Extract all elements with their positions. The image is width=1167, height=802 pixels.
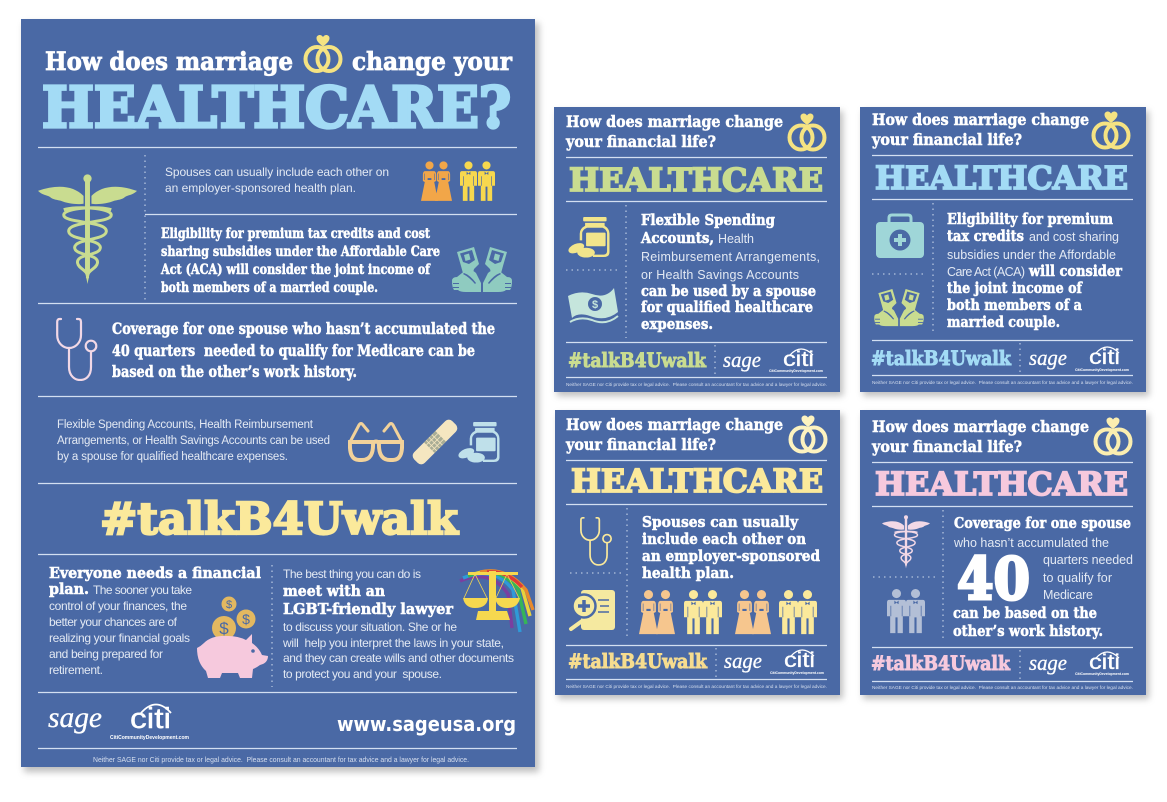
card text: Coverage for one spouse [954, 514, 1131, 532]
text: financial plan: realizing your financial goals [49, 631, 190, 645]
poster shadow [24, 23, 539, 772]
disclaimer: Neither SAGE nor Citi provide tax or legal advice. Please consult an accountant for tax advice and a lawyer for legal advice. [93, 755, 469, 764]
card title: your financial life? [871, 130, 1022, 149]
logo: citi [110, 703, 190, 741]
card text: Spouses can usually [642, 513, 799, 531]
card text [642, 513, 820, 582]
card title [565, 415, 783, 454]
icon: stethoscope [581, 518, 611, 565]
logos [1029, 345, 1129, 372]
text: financial plan: retirement. [49, 663, 103, 677]
text: financial plan: Everyone needs a financial [49, 565, 261, 582]
text: lawyer advice: will help you interpret the laws in your state, [282, 636, 504, 650]
hashtag: #talkB4Uwalk [100, 494, 460, 545]
card text: Health [718, 232, 754, 246]
card text: for qualified healthcare [641, 299, 813, 316]
icon: caduceus [38, 174, 137, 284]
text: financial plan: The sooner you take [93, 583, 192, 597]
icon: caduceus [882, 515, 930, 568]
card text: both members of a [947, 297, 1083, 314]
card text: can be used by a spouse [641, 283, 816, 300]
card text: Flexible Spending [641, 212, 775, 229]
card text: other’s work history. [953, 622, 1103, 640]
text: flexible spending [57, 419, 330, 463]
text: financial plan: and being prepared for [49, 647, 163, 661]
card title: How does marriage change [872, 110, 1089, 129]
title line one [45, 47, 513, 76]
text: eligibility: Eligibility for premium tax credits and cost [161, 226, 431, 242]
icon: grooms [887, 589, 925, 633]
text: eligibility [160, 226, 440, 296]
icon: rings [790, 415, 826, 452]
card text: Care Act (ACA) [947, 265, 1025, 279]
card text: Accounts, [640, 230, 714, 247]
hashtag: #talkB4Uwalk [871, 651, 1011, 675]
logos: CitiCommunityDevelopment.com [1075, 672, 1129, 676]
logos [724, 648, 824, 675]
icon: pill bottle [457, 422, 500, 463]
text: financial plan: better your chances are of [49, 615, 178, 629]
text: spouses [165, 165, 389, 195]
heading: HEALTHCARE [875, 465, 1128, 503]
icon: wedding rings [306, 35, 340, 71]
icon: bottle [567, 217, 610, 258]
card title: your financial life? [565, 132, 716, 151]
text: spouses: Spouses can usually include each other on [165, 165, 389, 179]
card text: will consider [1028, 263, 1122, 280]
logos: CitiCommunityDevelopment.com [770, 671, 824, 675]
icon: money hands [452, 247, 512, 292]
text: coverage [112, 319, 495, 381]
panel: poster [21, 19, 535, 767]
logo: sage: sage [48, 701, 102, 734]
card title [871, 110, 1089, 149]
heading: HEALTHCARE [569, 161, 823, 199]
icon: bandage [411, 418, 459, 466]
text: coverage: 40 quarters needed to qualify for Medicare can be [112, 341, 475, 360]
card text [947, 211, 1122, 331]
text: lawyer advice: The best thing you can do is [283, 567, 421, 581]
card text: and cost sharing [1029, 230, 1119, 244]
card text: health plan. [642, 564, 734, 582]
card title [871, 417, 1089, 456]
heading: HEALTHCARE [875, 159, 1128, 197]
card text: can be based on the [953, 604, 1097, 622]
website: www.sageusa.org [337, 712, 516, 736]
card text: the joint income of [947, 280, 1084, 297]
text: eligibility: Act (ACA) will consider the joint income of [160, 262, 431, 278]
text: lawyer advice: meet with an [283, 582, 385, 600]
panel: medicare card [860, 410, 1146, 695]
icon: stethoscope [57, 319, 96, 380]
icon: couples [421, 161, 495, 201]
card title: How does marriage change [566, 112, 783, 131]
card text: tax credits [947, 228, 1024, 245]
icon: rainbow scales of justice [460, 571, 533, 632]
text: eligibility: both members of a married couple. [161, 280, 378, 296]
icon: couples row [639, 590, 817, 634]
logos: citi [1089, 346, 1120, 369]
logos: citi [1089, 651, 1120, 674]
logos: sage [724, 648, 762, 673]
logos: sage [1029, 650, 1067, 675]
icon: rings [790, 113, 824, 150]
text: flexible spending: Arrangements, or Health Savings Accounts can be used [57, 435, 330, 447]
panel: premium tax credits card [860, 107, 1146, 392]
icon: cash [568, 288, 618, 322]
card text: expenses. [641, 316, 713, 333]
title line one: How does marriage [45, 47, 293, 76]
text: lawyer advice [282, 567, 514, 681]
text: flexible spending: by a spouse for qualified healthcare expenses. [57, 451, 288, 463]
logo: citi: citi [130, 703, 171, 735]
card text [953, 514, 1133, 640]
text: financial plan [49, 565, 261, 677]
card text: Medicare [1043, 588, 1093, 602]
hashtag: #talkB4Uwalk [568, 649, 708, 673]
logos: sage [723, 347, 761, 372]
card title: How does marriage change [566, 415, 783, 434]
logos: citi [783, 348, 814, 371]
icon: rings [1096, 417, 1130, 454]
icon: medical kit [876, 215, 924, 258]
panel shadows [557, 111, 1149, 699]
icon: piggy bank with coins: $ [219, 619, 229, 638]
card text: an employer-sponsored [642, 547, 820, 565]
icon: rings [1094, 111, 1128, 148]
card text: include each other on [642, 530, 806, 548]
disclaimer: Neither SAGE nor Citi provide tax or legal advice. Please consult an accountant for tax advice and a lawyer for legal advice. [872, 380, 1133, 386]
text: flexible spending: Flexible Spending Accounts, Health Reimbursement [57, 419, 314, 431]
panel: employer plan card [555, 410, 840, 695]
text: eligibility: sharing subsidies under the Affordable Care [161, 244, 440, 260]
card text: to qualify for [1043, 571, 1112, 585]
hashtag: #talkB4Uwalk [568, 348, 707, 372]
logos: sage [1029, 345, 1067, 370]
icon: piggy bank with coins: $ [242, 611, 250, 627]
logos: CitiCommunityDevelopment.com [1075, 368, 1129, 372]
text: coverage: Coverage for one spouse who hasn’t accumulated the [112, 319, 495, 338]
icon: cash: $ [592, 299, 598, 311]
panel: flexible spending card [554, 107, 840, 392]
icon: glasses [350, 424, 402, 460]
logos: citi [784, 649, 815, 672]
card text: who hasn’t accumulated the [953, 536, 1109, 550]
logos [723, 347, 823, 373]
text: financial plan: control of your finances, the [49, 599, 187, 613]
text: coverage: based on the other’s work history. [112, 362, 357, 381]
card text: subsidies under the Affordable [947, 248, 1116, 262]
hashtag: #talkB4Uwalk [871, 346, 1012, 370]
logos [1029, 650, 1129, 676]
logo: citi: CitiCommunityDevelopment.com [110, 735, 190, 741]
text: lawyer advice: to protect you and your spouse. [283, 667, 442, 681]
text: lawyer advice: and they can create wills and other documents [283, 651, 514, 665]
disclaimer: Neither SAGE nor Citi provide tax or legal advice. Please consult an accountant for tax advice and a lawyer for legal advice. [872, 685, 1133, 691]
card text: Reimbursement Arrangements, [641, 250, 820, 264]
text: financial plan: plan. [49, 581, 89, 598]
text: spouses: an employer-sponsored health plan. [165, 181, 356, 195]
heading: healthcare: HEALTHCARE? [42, 75, 511, 141]
card text: married couple. [947, 314, 1060, 331]
title line one: change your [352, 47, 513, 76]
heading: HEALTHCARE [571, 462, 823, 500]
card text: 40 [957, 545, 1030, 613]
card text: or Health Savings Accounts [641, 268, 799, 282]
disclaimer: Neither SAGE nor Citi provide tax or legal advice. Please consult an accountant for tax advice and a lawyer for legal advice. [566, 382, 827, 388]
card title [565, 112, 783, 151]
card text: quarters needed [1043, 553, 1133, 567]
card title: your financial life? [871, 437, 1022, 456]
text: lawyer advice: to discuss your situation. She or he [283, 620, 457, 634]
card text: Eligibility for premium [947, 211, 1114, 228]
disclaimer: Neither SAGE nor Citi provide tax or legal advice. Please consult an accountant for tax advice and a lawyer for legal advice. [566, 684, 827, 690]
card text [640, 212, 820, 333]
icon: piggy bank with coins: $ [226, 599, 232, 611]
logos: CitiCommunityDevelopment.com [769, 369, 823, 373]
icon: piggy bank with coins [197, 596, 268, 678]
text: lawyer advice: LGBT-friendly lawyer [283, 600, 454, 618]
card title: How does marriage change [872, 417, 1089, 436]
icon: magnifier document [571, 590, 615, 630]
icon: money hands [874, 289, 924, 326]
card title: your financial life? [565, 435, 716, 454]
